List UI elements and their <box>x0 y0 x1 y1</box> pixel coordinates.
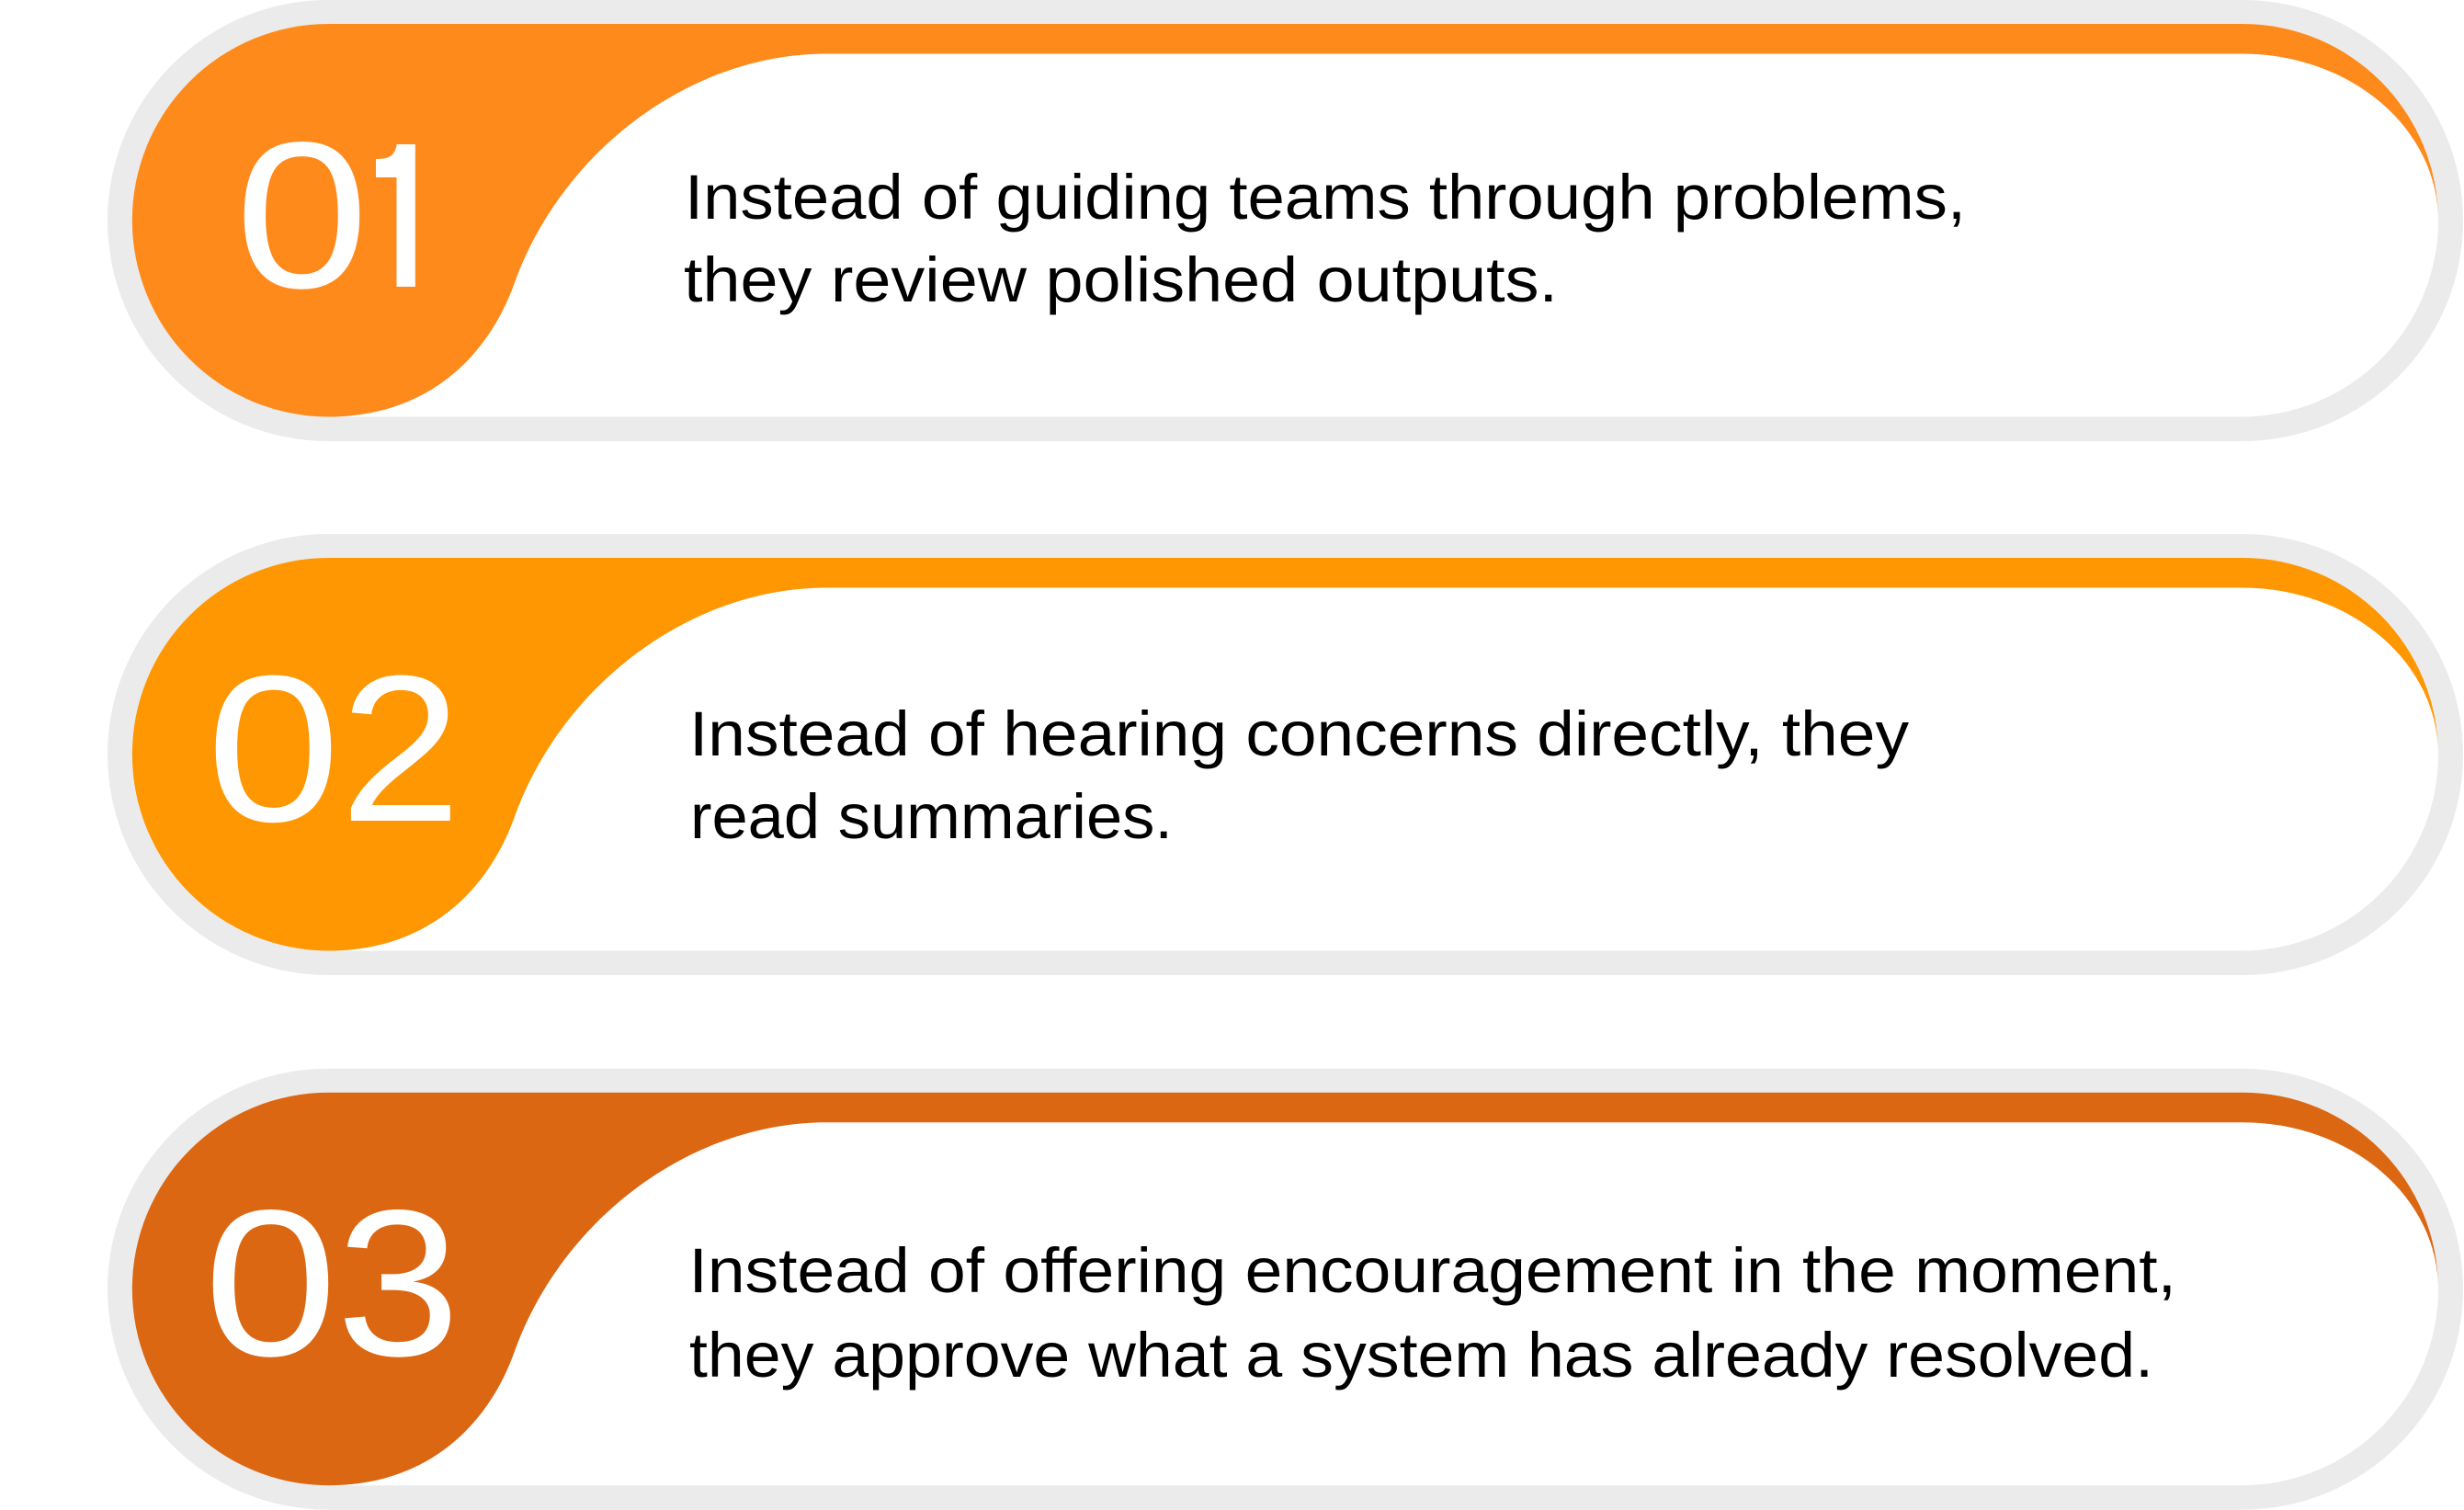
text: item 01: they review polished outputs. <box>684 244 1558 315</box>
pill interior <box>132 558 2438 950</box>
text: item 02: Instead of hearing concerns directly, they <box>689 698 1910 769</box>
number 01 <box>244 142 415 290</box>
number 03 <box>204 1166 460 1400</box>
text: item 01 <box>684 162 1966 315</box>
number 02: 2 <box>340 632 461 866</box>
text: item 03 <box>689 1235 2176 1391</box>
number 01: 1 <box>337 86 465 366</box>
dark orange number tab <box>132 1093 2438 1485</box>
text: item 03: Instead of offering encouragement in the moment, <box>689 1235 2176 1306</box>
text: item 03: they approve what a system has already resolved. <box>689 1320 2153 1391</box>
text: item 02 <box>689 698 1910 852</box>
number 01: 0 <box>235 98 369 332</box>
pill outline <box>108 1069 2463 1510</box>
pill outline <box>108 534 2463 975</box>
orange number tab <box>132 24 2438 417</box>
text: item 02: read summaries. <box>690 781 1173 852</box>
panel: item 01 <box>108 0 2463 441</box>
panel: item 02 <box>108 534 2463 975</box>
amber number tab <box>132 558 2438 950</box>
number 03: 0 <box>204 1166 337 1400</box>
number 02: 0 <box>206 632 340 865</box>
pill outline <box>108 0 2463 441</box>
text: item 01: Instead of guiding teams through problems, <box>685 162 1966 233</box>
pill interior <box>132 1093 2438 1485</box>
number 02 <box>206 632 461 866</box>
number 03: 3 <box>336 1166 460 1400</box>
panel: item 03 <box>108 1069 2463 1510</box>
pill interior <box>132 24 2438 417</box>
